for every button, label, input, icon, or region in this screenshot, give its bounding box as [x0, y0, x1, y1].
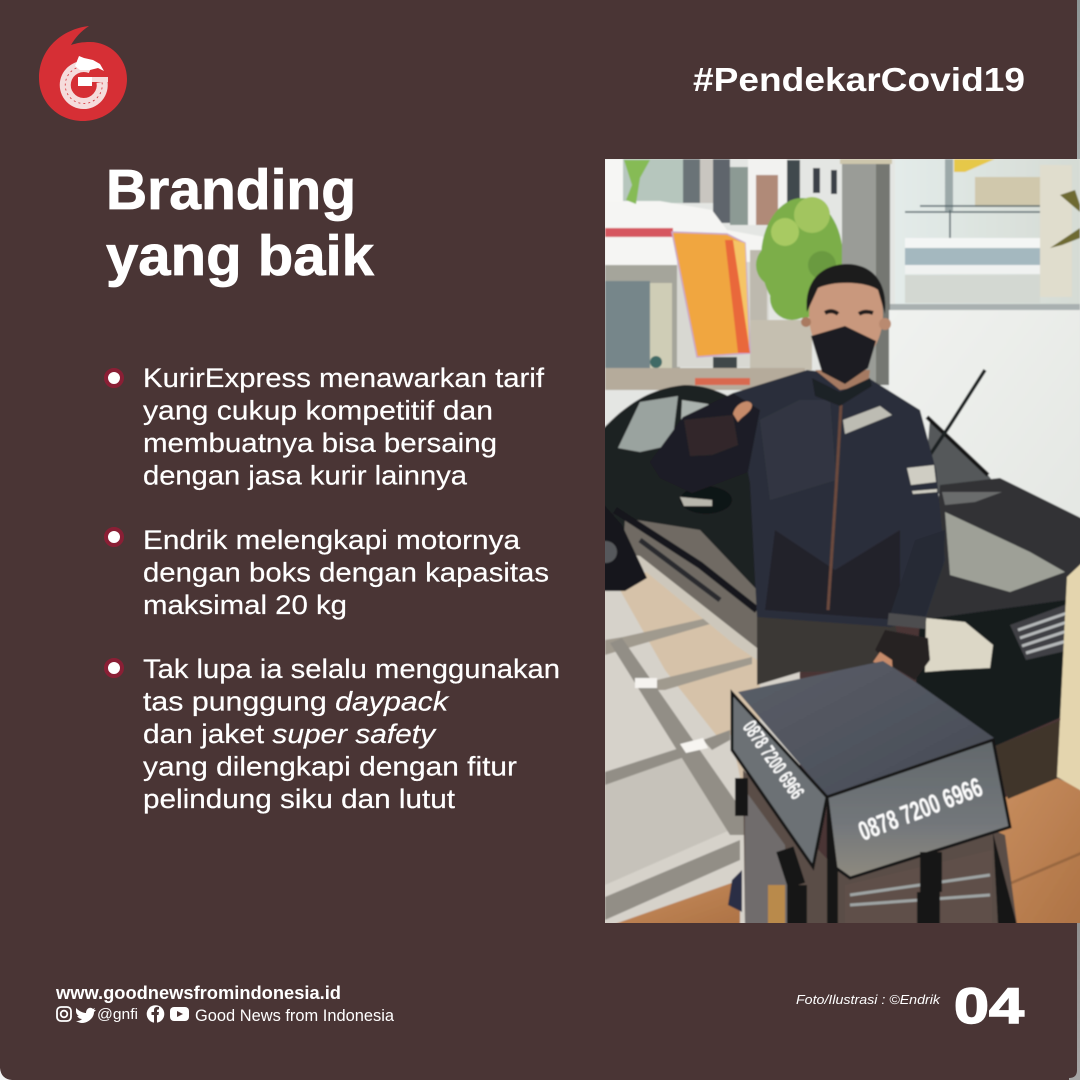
leaves top left — [624, 160, 650, 204]
bullet 3: pelindung siku dan lutut — [143, 784, 456, 814]
car hood — [925, 478, 1080, 630]
trousers — [756, 616, 896, 686]
ground under car — [996, 720, 1060, 800]
bullet 3 — [106, 654, 560, 814]
car wheel — [605, 506, 648, 592]
glass window with balcony — [890, 159, 1080, 310]
bullet 2 — [106, 525, 549, 620]
photo background: buildings — [605, 159, 1080, 519]
floor tiles — [600, 555, 800, 930]
bullet 1: yang cukup kompetitif dan — [143, 396, 493, 426]
social handle: @gnfi — [97, 1006, 138, 1023]
bullet 1: dengan jasa kurir lainnya — [143, 460, 468, 490]
jacket chevron logo — [843, 406, 892, 434]
courier figure — [650, 264, 945, 912]
icon: instagram — [57, 1007, 71, 1021]
delivery box — [732, 661, 1017, 925]
collar — [812, 378, 872, 406]
bullet 2: Endrik melengkapi motornya — [143, 525, 521, 555]
lowered sleeve — [892, 532, 944, 614]
foot — [728, 870, 742, 912]
bullet 3: tas punggung daypack — [143, 686, 450, 716]
raised arm — [650, 393, 760, 493]
car cabin and side — [605, 384, 757, 589]
thumbs up glove — [684, 402, 752, 456]
icon: youtube — [170, 1007, 189, 1021]
delivery box: 0878 7200 6966 — [738, 717, 808, 804]
neck — [815, 370, 870, 390]
bullet 1: membuatnya bisa bersaing — [143, 428, 497, 458]
photo: courier with delivery box and car — [595, 155, 1080, 930]
bullet 3: dan jaket super safety — [143, 719, 437, 749]
grey pillar — [840, 159, 892, 385]
white wall — [888, 309, 1000, 424]
footer left: website and socials — [55, 983, 395, 1025]
head — [800, 263, 892, 346]
title: Branding — [106, 158, 356, 222]
black car — [595, 370, 1080, 799]
bullet 2: dengan boks dengan kapasitas — [143, 558, 549, 588]
jacket zipper — [828, 405, 841, 610]
facebook and youtube name: Good News from Indonesia — [195, 1006, 395, 1025]
bullet 2: maksimal 20 kg — [143, 590, 347, 620]
car front and bumper — [915, 600, 1066, 747]
wooden floors — [616, 882, 741, 923]
phone number text: 0878 7200 6966 — [854, 772, 987, 847]
black face mask — [811, 326, 876, 384]
logo: red six with garuda G — [39, 26, 127, 121]
lid front flap — [827, 740, 1010, 878]
hanging orange cloth — [672, 232, 750, 357]
photo credit: Foto/Ilustrasi : ©Endrik — [796, 993, 941, 1007]
jacket body — [733, 370, 945, 627]
bullet 3: Tak lupa ia selalu menggunakan — [143, 654, 560, 684]
footer left: website and socials: www.goodnewsfromindonesia.id — [55, 983, 341, 1003]
title: yang baik — [106, 224, 374, 288]
box body — [743, 770, 1017, 925]
windshield and wiper — [926, 422, 992, 494]
bullet 1: KurirExpress menawarkan tarif — [143, 363, 545, 393]
box lid top — [738, 661, 994, 797]
bullet 3: yang dilengkapi dengan fitur — [143, 752, 517, 782]
page number: 04 — [954, 978, 1024, 1034]
grille — [1010, 603, 1070, 660]
icon: facebook — [147, 1005, 164, 1023]
hashtag: #PendekarCovid19 — [693, 61, 1025, 98]
box straps and buckles — [735, 778, 942, 925]
bullet 1 — [106, 363, 545, 490]
sleeve reflector — [907, 465, 936, 485]
lower glove on box — [873, 630, 930, 680]
icon: twitter — [76, 1008, 96, 1023]
bullet list — [106, 363, 560, 814]
lid left flap — [732, 693, 827, 867]
wing mirror — [680, 486, 732, 514]
headlight — [925, 618, 993, 672]
box orange logo — [768, 885, 785, 925]
title — [106, 158, 374, 288]
cream pillar — [1057, 560, 1080, 795]
green tree — [756, 197, 843, 320]
